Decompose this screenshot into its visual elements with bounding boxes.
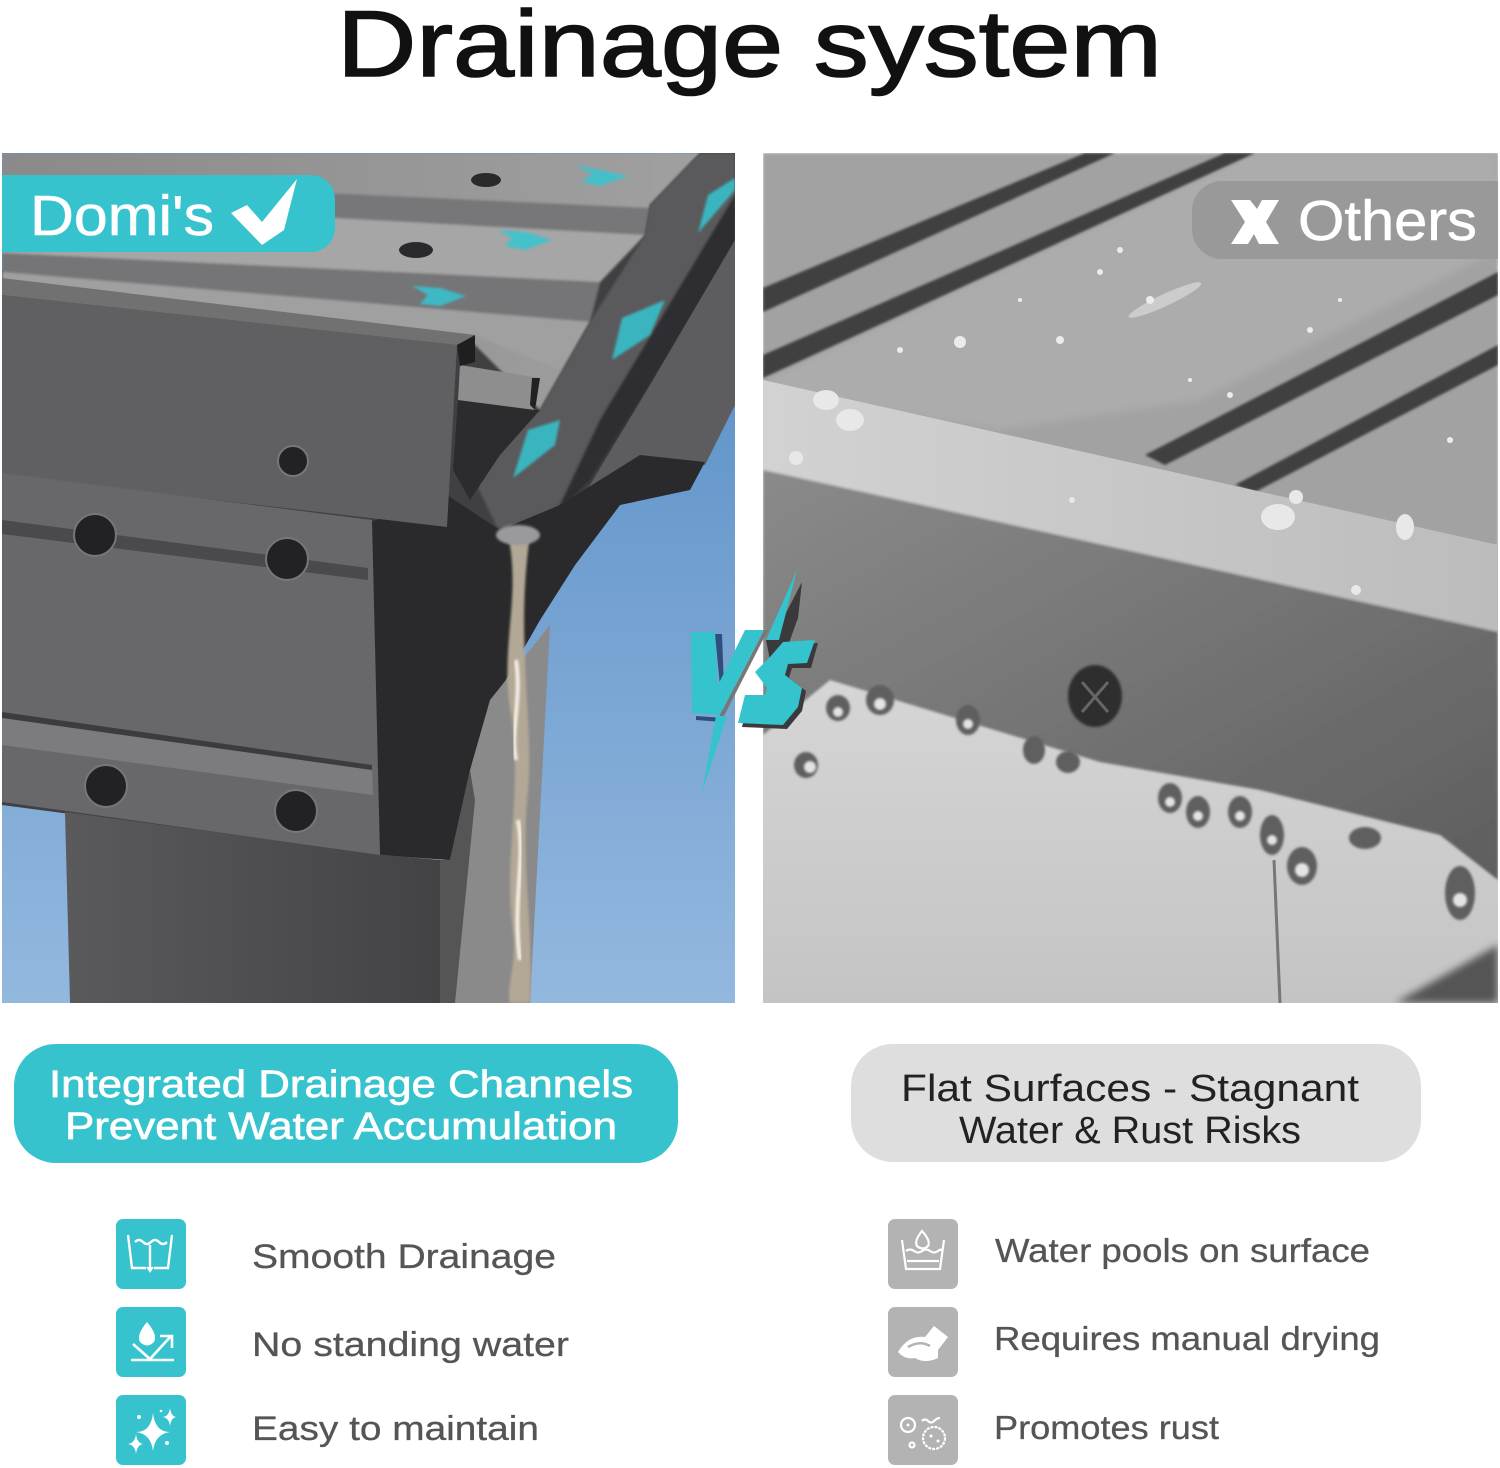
- water droplets on roof: [897, 247, 1453, 443]
- hanging drips: [794, 685, 1475, 920]
- metal roof: [763, 153, 1498, 560]
- panel: Domi's photo: [2, 153, 735, 1003]
- Others badge: [1192, 181, 1498, 259]
- roof screws: [399, 173, 501, 258]
- callout: Domi's headline: Prevent Water Accumulation: [65, 1106, 617, 1148]
- Domi's badge: Domi's: [30, 184, 214, 248]
- corrugated roof: [2, 153, 700, 410]
- falling water line: [1274, 860, 1280, 1003]
- beam screw: [1068, 665, 1122, 727]
- support arm: [455, 625, 550, 1003]
- icon: rust: [888, 1395, 958, 1465]
- text: manual drying: Requires manual drying: [994, 1320, 1380, 1357]
- drip highlights: [804, 698, 1467, 907]
- icon: check mark: [231, 179, 297, 245]
- icon: water pools: [888, 1219, 958, 1289]
- text: rust: Promotes rust: [994, 1409, 1219, 1446]
- icon: smooth drainage: [116, 1219, 186, 1289]
- nozzle: [496, 525, 540, 545]
- solid underlay of gutter structure: [2, 153, 735, 860]
- callout: Domi's headline: [14, 1044, 678, 1163]
- icon: no standing water: [116, 1307, 186, 1377]
- beam top face: [763, 380, 1498, 632]
- text: smooth drainage: Smooth Drainage: [252, 1238, 556, 1276]
- text: easy to maintain: Easy to maintain: [252, 1410, 539, 1448]
- water stream: [507, 535, 531, 1003]
- panel: Others photo: [763, 153, 1498, 1003]
- callout: Others headline: Flat Surfaces - Stagnant: [901, 1068, 1359, 1110]
- VS badge: [691, 570, 818, 792]
- beam front face: [763, 470, 1498, 880]
- callout: Others headline: [851, 1044, 1421, 1162]
- callout: Domi's headline: Integrated Drainage Channels: [49, 1064, 633, 1106]
- fascia screws: [74, 446, 317, 832]
- blue flow arrows: [412, 165, 735, 478]
- text: no standing water: No standing water: [252, 1326, 569, 1364]
- dark roof stripes: [763, 153, 1498, 492]
- droplets on beam: [789, 390, 1414, 595]
- gutter outer wall: [589, 240, 735, 487]
- text: water pools: Water pools on surface: [995, 1232, 1370, 1269]
- black gutter underside: [370, 455, 705, 860]
- post: [65, 812, 440, 1003]
- Others badge: Others: [1298, 189, 1477, 253]
- icon: manual drying: [888, 1307, 958, 1377]
- icon: easy to maintain: [116, 1395, 186, 1465]
- fascia panel: [2, 473, 380, 855]
- gutter channel: [455, 153, 735, 532]
- Domi's badge: [2, 175, 335, 252]
- callout: Others headline: Water & Rust Risks: [959, 1110, 1301, 1152]
- icon: cross mark: [1231, 200, 1279, 244]
- dark corner: [1395, 945, 1498, 1003]
- front beam: [2, 295, 457, 527]
